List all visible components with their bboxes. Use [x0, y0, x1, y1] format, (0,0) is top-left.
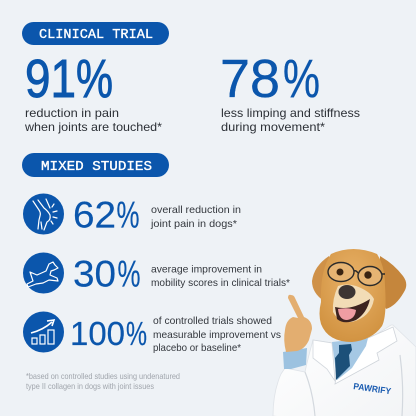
number: 30% — [73, 254, 140, 294]
text: average improvement: mobility scores in clinical trials* — [151, 277, 290, 289]
text: controlled trials — [153, 315, 281, 354]
text: controlled trials: of controlled trials showed — [153, 315, 272, 327]
footnote: type II collagen in dogs with joint issues — [26, 382, 154, 391]
stat: 78 percent — [220, 49, 360, 134]
icon: knee joint — [23, 194, 64, 234]
shirt and tie — [332, 338, 368, 380]
icon: running dog — [23, 252, 64, 294]
stat: 91 percent: when joints are touched* — [24, 120, 162, 134]
icon: rising bar chart — [23, 312, 64, 352]
coat logo: PAWRIFY — [353, 381, 392, 396]
lab coat — [273, 325, 416, 416]
number: 62%: 62 — [73, 194, 116, 236]
number: 30%: % — [118, 254, 140, 294]
stat: 91 percent — [24, 49, 162, 134]
text: average improvement — [151, 264, 290, 289]
heading: mixed studies — [22, 153, 169, 177]
text: overall reduction: overall reduction in — [151, 204, 241, 216]
footnote: *based on controlled studies using undenatured — [26, 372, 180, 381]
mouth and tongue — [335, 299, 370, 322]
heading: clinical trial: CLINICAL TRIAL — [39, 28, 153, 43]
head and neck fur — [320, 249, 386, 342]
heading: clinical trial — [22, 22, 169, 45]
sleeve and hand pointing up — [283, 295, 312, 369]
heading: mixed studies: MIXED STUDIES — [41, 160, 152, 175]
stat: 78 percent: 78 — [220, 49, 280, 109]
stat: 78 percent: less limping and stiffness — [221, 106, 360, 120]
number: 62% — [73, 194, 140, 236]
illustration: dog in lab coat — [273, 249, 416, 416]
row: 100 percent — [23, 312, 281, 354]
row: 30 percent — [23, 252, 290, 294]
footnote — [26, 372, 180, 391]
number: 62%: % — [116, 194, 140, 236]
nose — [338, 285, 356, 299]
text: average improvement: average improvement in — [151, 264, 262, 276]
stat: 78 percent: during movement* — [221, 120, 325, 134]
row: 62 percent — [23, 194, 241, 236]
ears — [312, 256, 332, 301]
muzzle — [333, 284, 374, 322]
stat: 78 percent: % — [283, 49, 320, 109]
text: controlled trials: measurable improvement vs — [153, 329, 281, 341]
text: controlled trials: placebo or baseline* — [153, 342, 241, 354]
number: 30%: 30 — [73, 254, 116, 294]
glasses — [328, 262, 385, 286]
number: 100%: % — [126, 315, 147, 352]
stat: 91 percent: % — [76, 49, 113, 109]
number: 100%: 100 — [70, 315, 125, 352]
stat: 91 percent: reduction in pain — [25, 106, 119, 120]
stat: 91 percent: 91 — [25, 49, 76, 109]
text: overall reduction: joint pain in dogs* — [150, 218, 237, 230]
text: overall reduction — [150, 204, 241, 230]
